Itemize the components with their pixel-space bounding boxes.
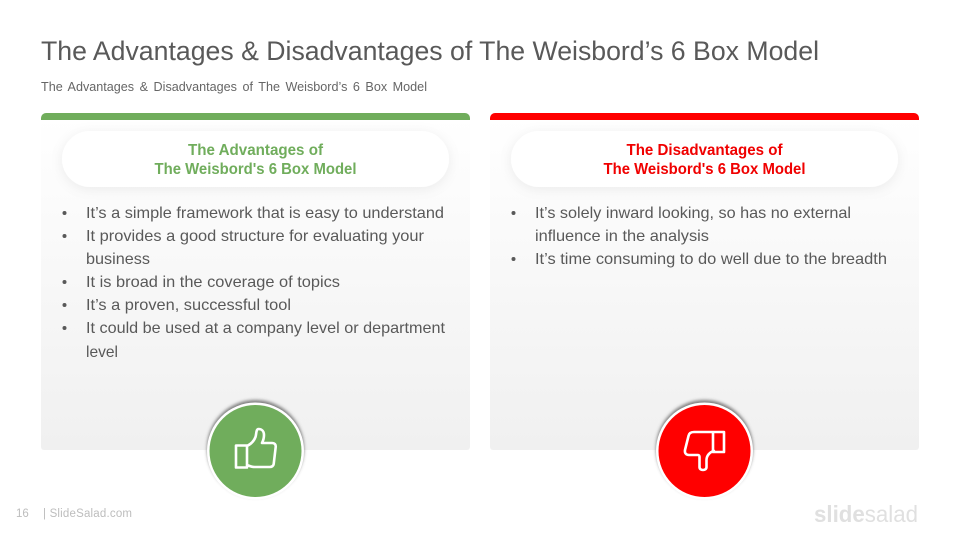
advantages bullet list: It’s a simple framework that is easy to understand (86, 205, 444, 222)
panel: advantages (41, 113, 470, 500)
advantages bullet list: business (86, 251, 150, 268)
panel background (41, 117, 470, 450)
disadvantages bullet list: It’s solely inward looking, so has no external (535, 205, 851, 222)
footer: page number and site: | SlideSalad.com (43, 508, 132, 520)
advantages bullet list (62, 205, 446, 361)
heading pill: The Weisbord's 6 Box Model (604, 161, 806, 178)
icon: thumbs up badge (207, 400, 304, 500)
green top bar (41, 113, 470, 120)
title: The Advantages & Disadvantages of The Weisbord’s 6 Box Model (41, 36, 819, 66)
advantages bullet list: level (86, 344, 118, 361)
panel: disadvantages (490, 113, 919, 500)
heading pill: The Weisbord's 6 Box Model (154, 161, 356, 178)
disadvantages bullet list: influence in the analysis (535, 228, 709, 245)
disadvantages bullet list: It’s time consuming to do well due to the breadth (535, 251, 887, 268)
logo: slidesalad wordmark: slidesalad (814, 501, 918, 527)
disadvantages bullet list (512, 205, 887, 268)
heading pill (511, 131, 898, 187)
panel background (490, 117, 919, 450)
footer: page number and site: 16 (16, 508, 29, 520)
heading pill (62, 131, 449, 187)
icon: thumbs down badge (656, 400, 753, 500)
advantages bullet list: It is broad in the coverage of topics (86, 274, 340, 291)
advantages bullet list: It’s a proven, successful tool (86, 297, 291, 314)
heading pill: The Advantages of (188, 142, 324, 159)
advantages bullet list: It could be used at a company level or department (86, 320, 446, 337)
advantages bullet list: It provides a good structure for evaluating your (86, 228, 425, 245)
subtitle: The Advantages & Disadvantages of The Weisbord’s 6 Box Model (41, 80, 427, 94)
red top bar (490, 113, 919, 120)
heading pill: The Disadvantages of (626, 142, 783, 159)
